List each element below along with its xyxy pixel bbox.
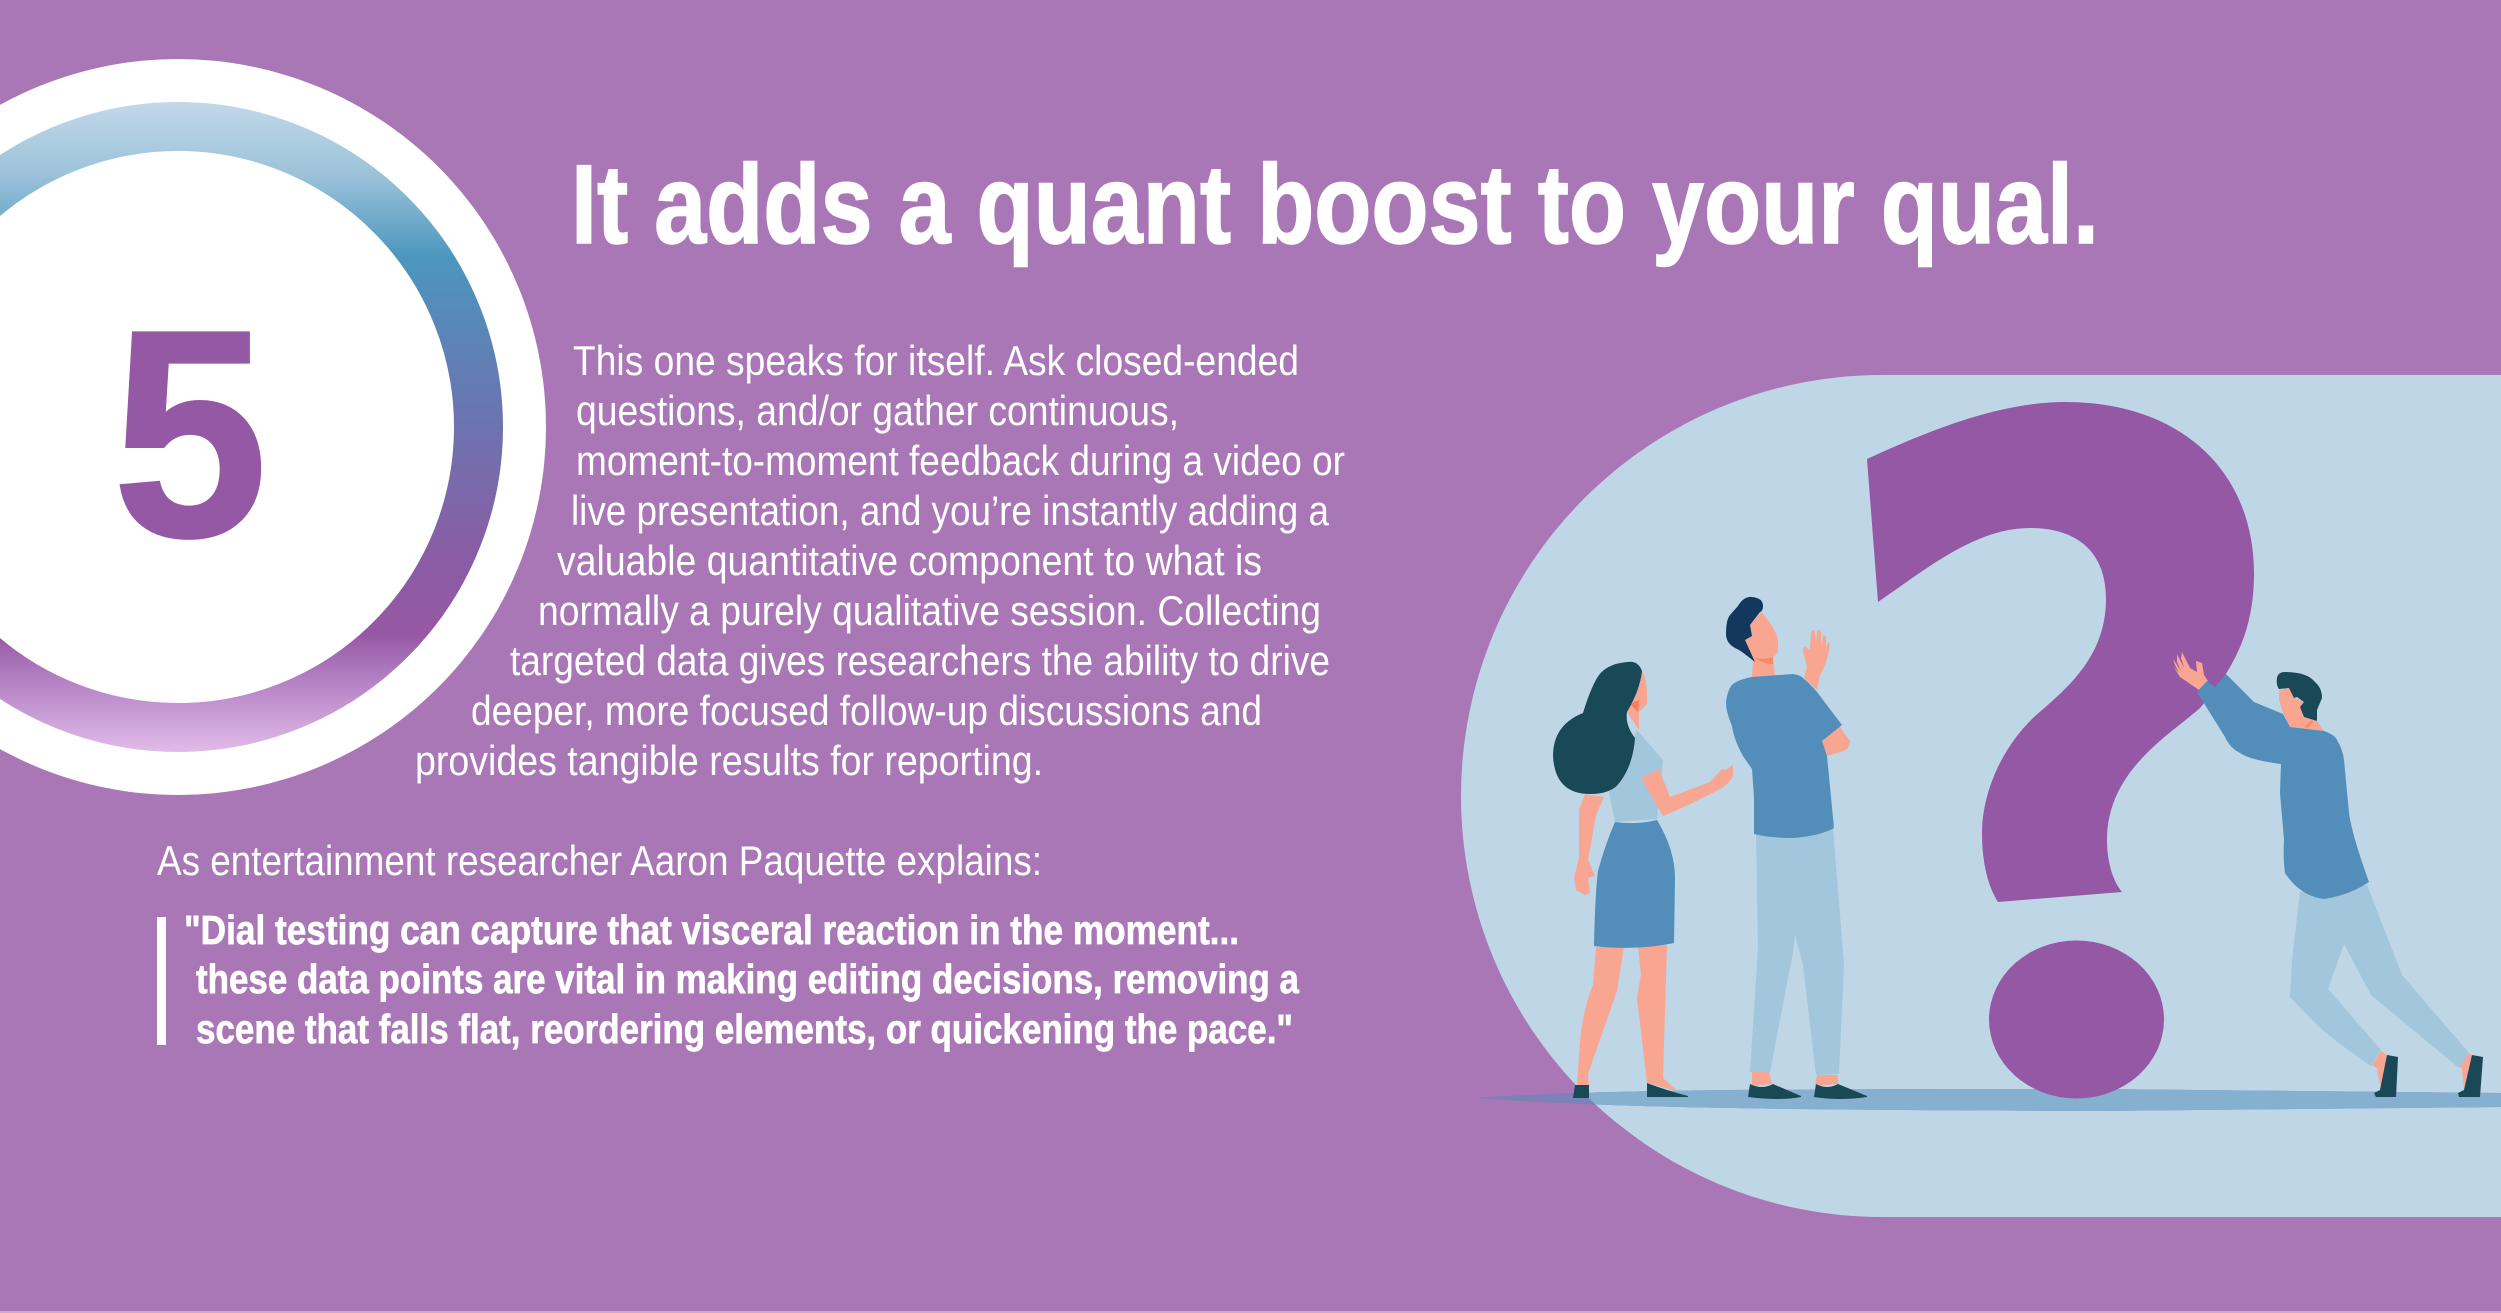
body paragraph: normally a purely qualitative session. Collecting <box>538 587 1321 634</box>
standing man figure <box>1726 597 1867 1099</box>
body paragraph: moment-to-moment feedback during a video or <box>576 437 1345 484</box>
body paragraph: deeper, more focused follow-up discussions and <box>471 687 1262 734</box>
quote bar <box>157 917 166 1045</box>
quote <box>157 907 1300 1052</box>
body paragraph: provides tangible results for reporting. <box>415 737 1043 784</box>
woman figure <box>1553 662 1733 1098</box>
body paragraph <box>415 337 1345 784</box>
number 5: 5 <box>112 268 268 599</box>
pushing man figure <box>2173 652 2483 1097</box>
body paragraph: This one speaks for itself. Ask closed-ended <box>573 337 1299 384</box>
question mark <box>1867 402 2254 1098</box>
quote text: these data points are vital in making editing decisions, removing a <box>196 956 1300 1002</box>
illustration: people and question mark <box>1461 375 2501 1217</box>
badge gradient ring <box>0 126 478 728</box>
body paragraph: questions, and/or gather continuous, <box>576 387 1179 434</box>
number badge <box>0 59 546 795</box>
quote text <box>184 907 1300 1052</box>
quote text: "Dial testing can capture that visceral reaction in the moment... <box>184 907 1239 953</box>
quote text: scene that falls flat, reordering elements, or quickening the pace." <box>196 1006 1293 1052</box>
ground shadow <box>1475 1089 2501 1111</box>
body paragraph: valuable quantitative component to what is <box>557 537 1262 584</box>
title: It adds a quant boost to your qual. <box>571 142 2099 267</box>
badge white disc <box>0 59 546 795</box>
light blue pill <box>1461 375 2501 1217</box>
body paragraph: targeted data gives researchers the ability to drive <box>510 637 1330 684</box>
body paragraph: live presentation, and you’re instantly adding a <box>571 487 1330 534</box>
attribution line: As entertainment researcher Aaron Paquette explains: <box>157 837 1042 884</box>
